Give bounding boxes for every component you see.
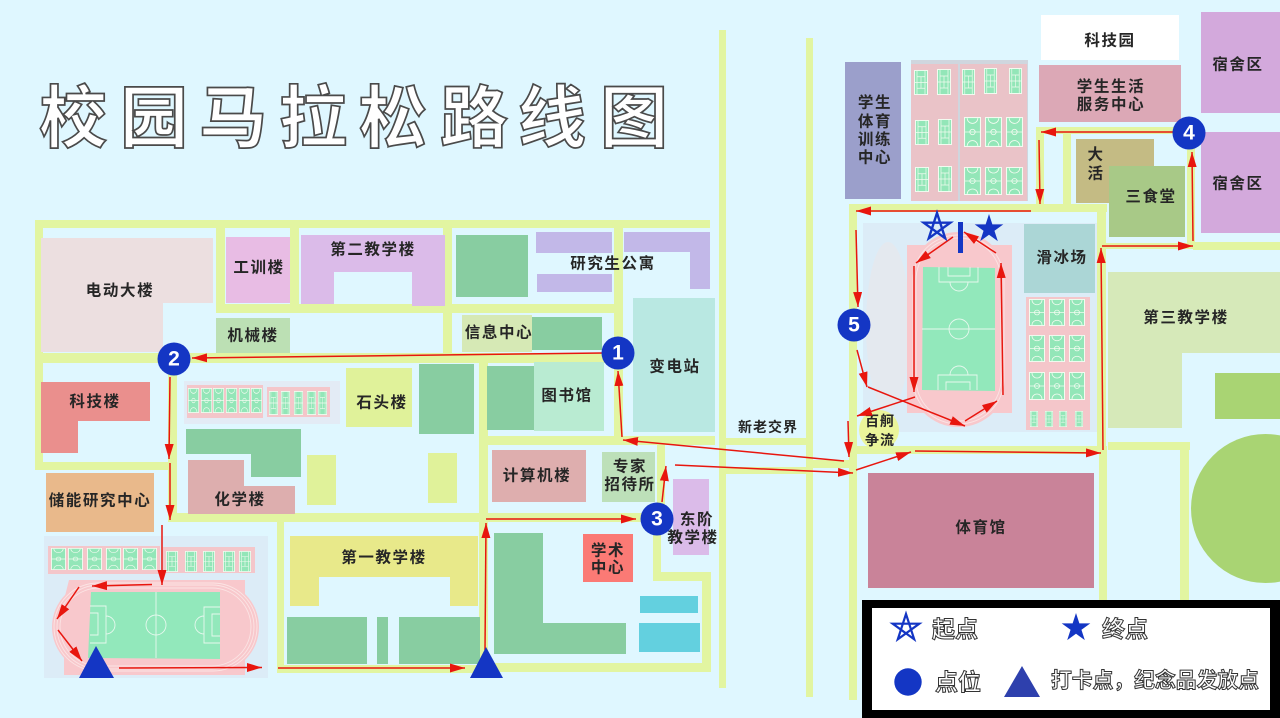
- building: 化学楼: 化学楼: [214, 490, 266, 508]
- building: 宿舍区 north: 宿舍区: [1212, 54, 1264, 74]
- building: 大活: 活: [1087, 164, 1105, 182]
- check-in triangle west: [79, 646, 114, 678]
- point 1: [602, 336, 634, 370]
- building: 东阶教学楼: 教学楼: [667, 528, 719, 546]
- point 2: [158, 342, 190, 376]
- building: green row: [287, 617, 480, 664]
- building: green L south: [494, 533, 626, 654]
- building: 专家招待所: 专家: [613, 456, 647, 476]
- building: 变电站: [633, 298, 715, 432]
- point 1: 1: [612, 342, 624, 364]
- start-finish bar: [958, 222, 963, 253]
- panel: north courts block: [911, 60, 1028, 201]
- point 5: [838, 308, 870, 342]
- courts block east: [1026, 297, 1090, 430]
- building: 第一教学楼: [290, 536, 478, 606]
- building: 石头楼: [346, 364, 474, 434]
- building: 学术中心: 学术: [591, 540, 625, 560]
- route arrows: [57, 132, 1193, 668]
- building: 变电站: 变电站: [649, 356, 701, 376]
- courts strip: north: [184, 381, 340, 424]
- building: 计算机楼: 计算机楼: [503, 466, 571, 484]
- legend: start: [893, 614, 978, 642]
- building: 储能研究中心: 储能研究中心: [49, 490, 151, 510]
- landmark: 百舸争流: 百舸: [865, 413, 895, 429]
- point 4: 4: [1183, 122, 1195, 144]
- building: green block north: [456, 235, 528, 297]
- building: 科技楼: [41, 382, 150, 453]
- icon: start star: [924, 213, 950, 238]
- building: 东阶教学楼: [667, 479, 719, 555]
- building: 三食堂: [1109, 166, 1185, 237]
- landmark: 百舸争流: [859, 410, 899, 450]
- building: 石头楼: 石头楼: [356, 394, 408, 412]
- building: 科技园: 科技园: [1084, 30, 1136, 50]
- building: 信息中心: 信息中心: [465, 322, 533, 342]
- building: cyan blocks: [639, 596, 700, 652]
- check-in triangle middle: [470, 647, 503, 678]
- building: 图书馆: [487, 362, 604, 431]
- building: 体育馆: 体育馆: [955, 518, 1007, 536]
- point 3: 3: [651, 508, 663, 530]
- building: 体育馆: [868, 473, 1094, 588]
- building: 大活: 大: [1087, 146, 1105, 164]
- building: 研究生公寓: 研究生公寓: [570, 254, 656, 272]
- building: 图书馆: 图书馆: [541, 386, 593, 404]
- building: 第二教学楼: [301, 235, 445, 306]
- building: 计算机楼: [492, 450, 586, 502]
- building: 宿舍区 south: 宿舍区: [1212, 174, 1264, 192]
- building: 第三教学楼: 第三教学楼: [1143, 308, 1229, 326]
- building: 学生生活服务中心: [1039, 65, 1181, 122]
- building: 学生生活服务中心: 学生生活: [1077, 76, 1145, 96]
- building: 科技楼: 科技楼: [69, 392, 121, 410]
- building: 东阶教学楼: 东阶: [680, 510, 714, 528]
- building: 学术中心: [583, 534, 633, 582]
- icon: finish star: [975, 214, 1003, 241]
- legend: finish: 终点: [1102, 616, 1148, 642]
- building: 宿舍区 north: [1201, 12, 1280, 113]
- building: 滑冰场: 滑冰场: [1036, 248, 1088, 266]
- legend: check-in: [1004, 666, 1259, 697]
- point 3: [640, 502, 674, 536]
- building: 学生体育训练中心: 中心: [858, 148, 892, 166]
- building: 科技园: [1041, 15, 1179, 60]
- legend: point: [894, 668, 981, 696]
- legend: [862, 600, 1280, 718]
- building: 机械楼: 机械楼: [227, 326, 279, 344]
- landmark: 百舸争流: 争流: [865, 432, 895, 448]
- point 5: 5: [848, 314, 860, 336]
- legend: finish: [1062, 613, 1148, 642]
- building: 大活: [1076, 139, 1154, 203]
- building: green L block: [186, 429, 301, 477]
- building: pale blocks: [307, 453, 457, 505]
- building: 信息中心: [462, 315, 602, 352]
- legend: check-in: 打卡点，纪念品发放点: [1051, 668, 1259, 692]
- building: 专家招待所: [602, 452, 656, 502]
- green square: [1215, 373, 1280, 419]
- building: 滑冰场: [1024, 224, 1095, 293]
- building: 机械楼: [216, 318, 290, 353]
- building: 第二教学楼: 第二教学楼: [330, 240, 416, 258]
- building: 三食堂: 三食堂: [1125, 186, 1177, 206]
- building: 工训楼: [226, 237, 290, 303]
- building: 学术中心: 中心: [591, 558, 625, 576]
- building: 宿舍区 south: [1201, 132, 1280, 233]
- building: 电动大楼: [41, 238, 213, 352]
- panel: west campus buildings: [41, 232, 719, 664]
- building: 储能研究中心: [46, 473, 154, 532]
- building: 学生体育训练中心: 体育: [858, 112, 892, 130]
- building: 学生生活服务中心: 服务中心: [1077, 94, 1145, 114]
- building: 电动大楼: 电动大楼: [86, 282, 154, 300]
- green round field: [1191, 434, 1280, 583]
- panel: east campus buildings: [845, 12, 1280, 588]
- panel: west stadium: [44, 536, 268, 678]
- building: 学生体育训练中心: [845, 62, 901, 199]
- building: 学生体育训练中心: 训练: [858, 130, 892, 148]
- panel: east stadium: [859, 223, 1097, 450]
- title: 校园马拉松路线图: [39, 81, 668, 157]
- building: 研究生公寓: [536, 232, 710, 292]
- legend: point: 点位: [935, 669, 981, 695]
- building: 化学楼: [188, 460, 295, 514]
- building: 第三教学楼: [1108, 272, 1280, 428]
- building: 第一教学楼: 第一教学楼: [341, 548, 427, 566]
- building: 专家招待所: 招待所: [604, 476, 656, 494]
- building: 工训楼: 工训楼: [233, 258, 285, 276]
- legend: start: 起点: [932, 616, 978, 642]
- point 4: [1172, 116, 1206, 150]
- label: 新老交界: 新老交界: [738, 419, 798, 435]
- building: 学生体育训练中心: 学生: [858, 92, 892, 112]
- point 2: 2: [168, 348, 180, 370]
